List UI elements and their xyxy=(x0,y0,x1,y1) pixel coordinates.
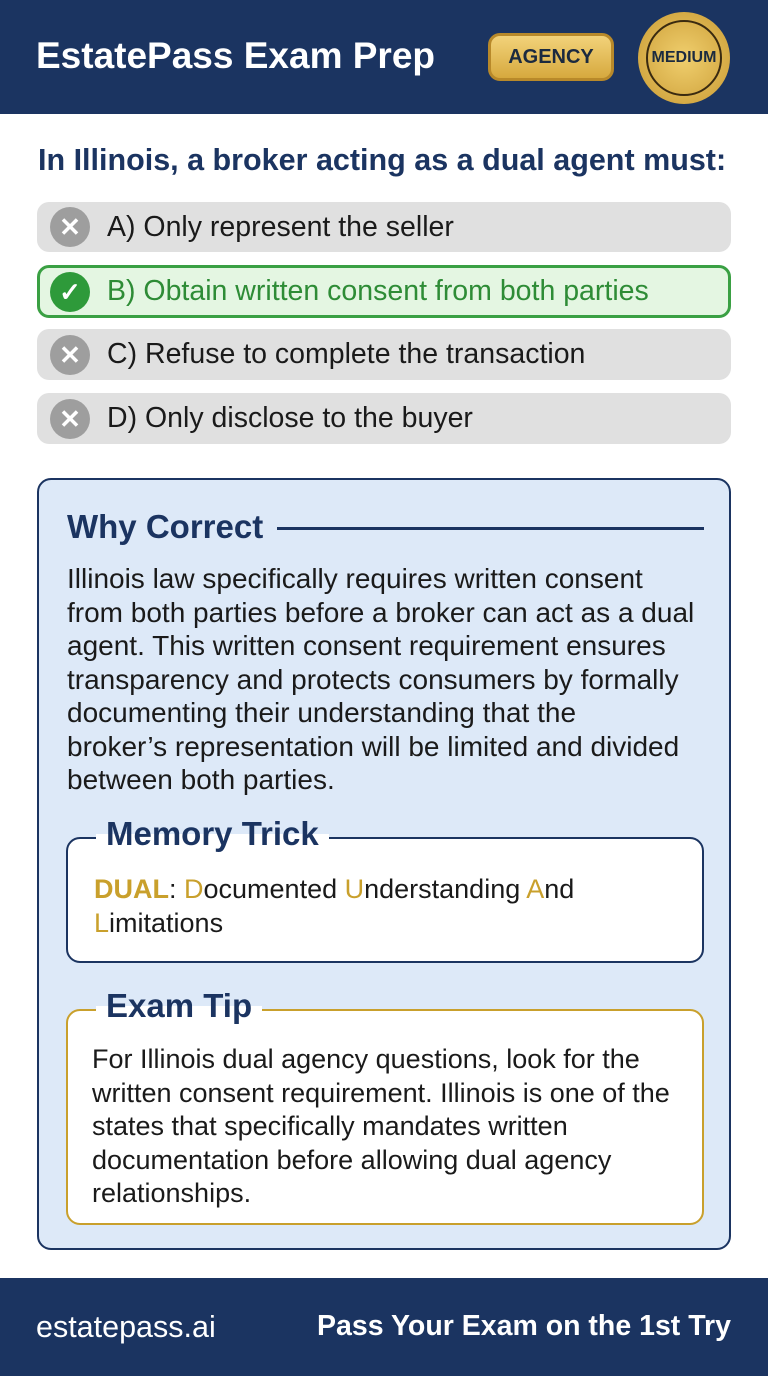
text: mnemonic: Limitations xyxy=(94,908,223,938)
heading: why correct xyxy=(67,508,704,545)
option C: ✕ xyxy=(59,340,81,370)
heading: exam tip: Exam Tip xyxy=(106,987,252,1024)
option D xyxy=(37,393,731,444)
badge: medium seal xyxy=(638,12,730,104)
footer xyxy=(0,1278,768,1376)
heading: memory trick: Memory Trick xyxy=(106,815,319,852)
option A: A) Only represent the seller xyxy=(107,210,454,242)
badge: agency: AGENCY xyxy=(508,46,594,68)
text: tip: relationships. xyxy=(92,1178,251,1208)
text: explanation xyxy=(67,563,694,795)
text: explanation: documenting their understanding that the xyxy=(67,697,576,728)
text: explanation: Illinois law specifically requires written consent xyxy=(67,563,643,594)
heading: why correct: Why Correct xyxy=(67,508,263,545)
box: exam tip xyxy=(66,1009,704,1225)
option D: ✕ xyxy=(59,404,81,434)
text: explanation: transparency and protects consumers by formally xyxy=(67,664,679,694)
box: memory trick xyxy=(66,837,704,963)
text: tip xyxy=(92,1044,670,1208)
text: explanation: agent. This written consent requirement ensures xyxy=(67,630,666,661)
option B correct xyxy=(37,265,731,318)
badge: agency xyxy=(488,33,614,81)
option C: C) Refuse to complete the transaction xyxy=(107,338,585,370)
text: explanation: from both parties before a broker can act as a dual xyxy=(67,596,694,628)
question heading: In Illinois, a broker acting as a dual agent must: xyxy=(38,143,726,177)
option D: D) Only disclose to the buyer xyxy=(107,402,473,434)
text: tip: documentation before allowing dual agency xyxy=(92,1144,611,1174)
text: explanation: broker’s representation will be limited and divided xyxy=(67,730,679,762)
text: mnemonic xyxy=(94,874,574,938)
header xyxy=(0,0,768,114)
option A xyxy=(37,202,731,252)
footer: tagline: Pass Your Exam on the 1st Try xyxy=(317,1310,731,1342)
option A: ✕ xyxy=(59,212,81,242)
panel: explanation xyxy=(37,478,731,1250)
badge: medium seal: MEDIUM xyxy=(652,49,716,66)
text: mnemonic: DUAL: Documented Understanding And xyxy=(94,874,574,904)
text: tip: For Illinois dual agency questions, look for the xyxy=(92,1044,640,1074)
footer: url: estatepass.ai xyxy=(36,1310,216,1344)
option B correct: ✓ xyxy=(59,276,81,306)
text: tip: written consent requirement. Illinois is one of the xyxy=(92,1078,670,1108)
text: tip: states that specifically mandates written xyxy=(92,1111,568,1141)
text: explanation: between both parties. xyxy=(67,764,335,795)
option B correct: B) Obtain written consent from both parties xyxy=(107,275,649,307)
title: brand: EstatePass Exam Prep xyxy=(36,35,435,76)
option C xyxy=(37,329,731,380)
